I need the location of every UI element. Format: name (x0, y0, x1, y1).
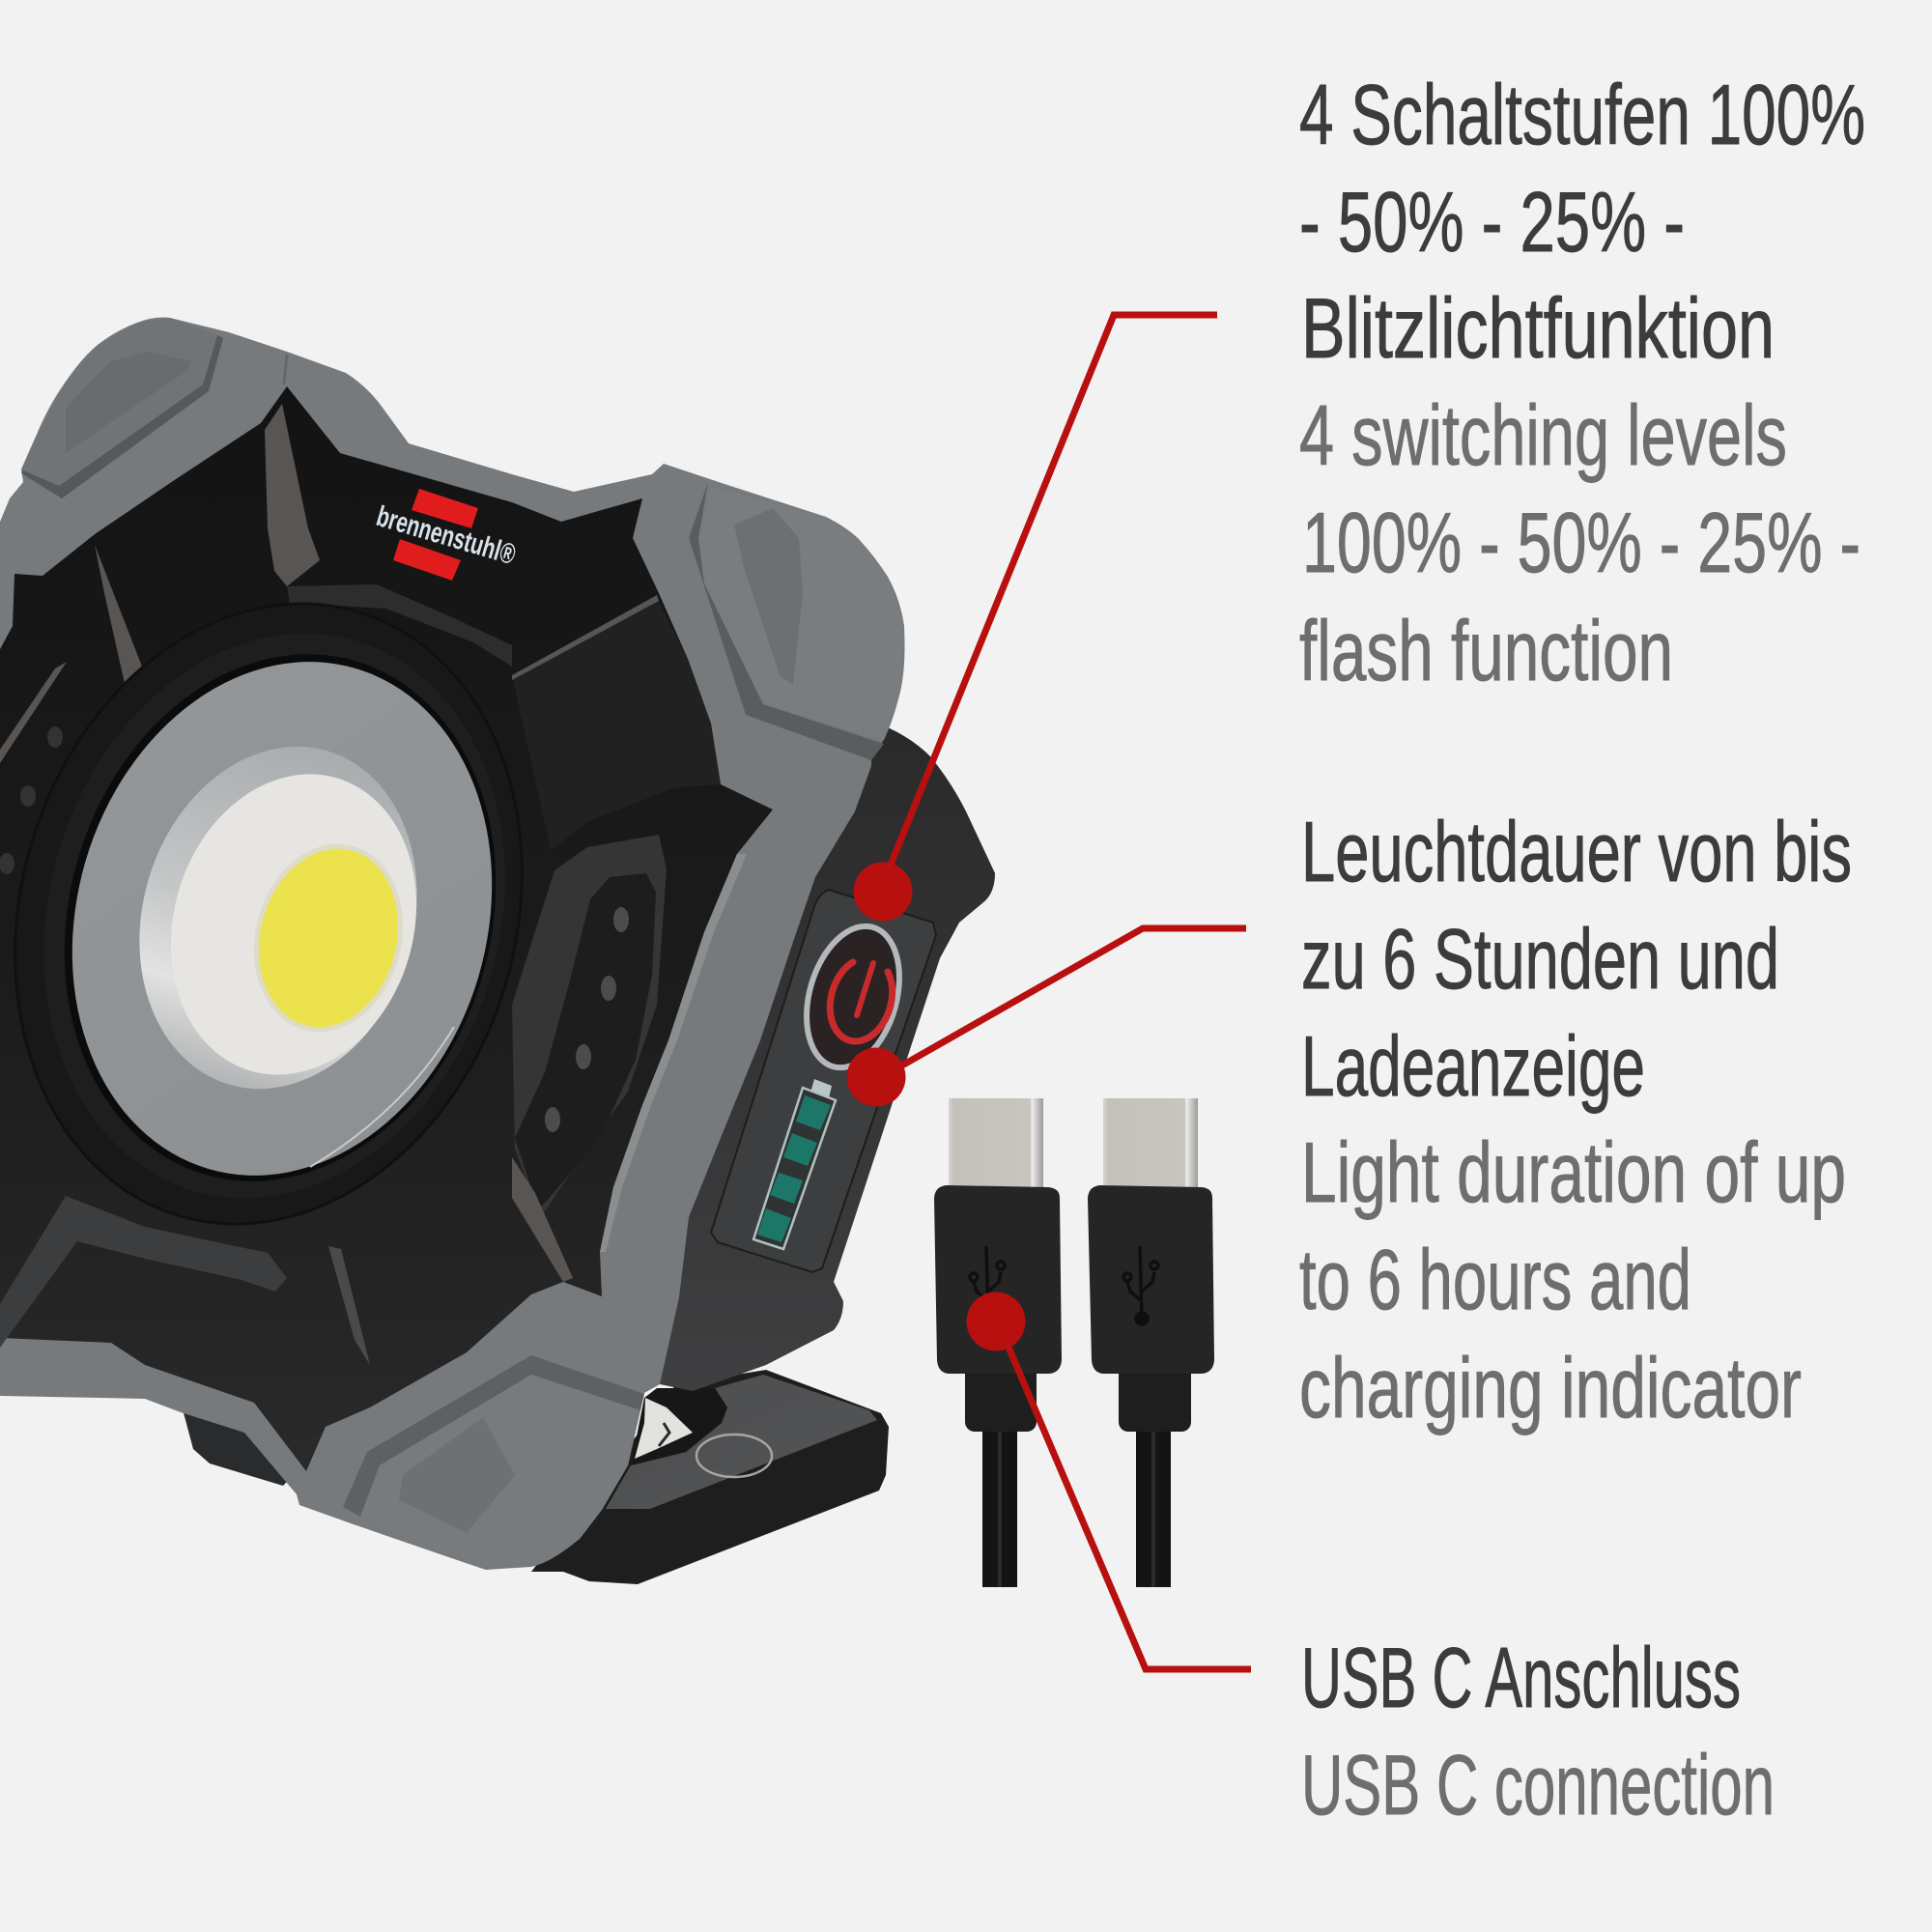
USB symbol (970, 1246, 1005, 1321)
side dots (0, 726, 629, 1132)
left bumper sliver (0, 567, 14, 649)
body facets (0, 584, 721, 1348)
USB symbol (1123, 1246, 1158, 1324)
battery indicator (753, 1079, 836, 1249)
bottom bumper pad (343, 1355, 644, 1570)
marker dot (966, 1293, 1026, 1350)
USB-C cable right (1088, 1098, 1214, 1587)
text block: to 6 hours and (1299, 1232, 1691, 1327)
yellow COB LED (238, 831, 419, 1045)
brand logo: brennenstuhl® (373, 500, 519, 571)
power button (791, 916, 915, 1078)
bumper highlight (600, 854, 747, 1252)
metal grooves (0, 404, 659, 1365)
top-right bumper pad (689, 482, 904, 760)
front body (0, 386, 773, 1471)
rear housing (638, 727, 995, 1391)
marker dot (854, 862, 912, 922)
reflector (135, 744, 452, 1105)
text block: Blitzlichtfunktion (1301, 280, 1775, 376)
USB-C cable left (934, 1098, 1062, 1587)
leader line (894, 928, 1246, 1070)
lens housing (0, 542, 595, 1286)
illustration: LED work light (0, 318, 995, 1584)
lower left foot (182, 1391, 319, 1486)
callout: light duration (846, 804, 1852, 1435)
text block: flash function (1299, 603, 1673, 698)
text block (1301, 1630, 1775, 1833)
text block: - 50% - 25% - (1299, 174, 1685, 270)
callout: USB C (966, 1293, 1775, 1833)
text block: Ladeanzeige (1301, 1018, 1645, 1114)
leader line (1005, 1338, 1251, 1669)
ring highlight (310, 1027, 454, 1167)
chrome ring (99, 713, 457, 1122)
magnetic base (531, 1370, 889, 1584)
marker dot (846, 1047, 906, 1107)
callout: switching levels (854, 67, 1865, 922)
leader line (887, 315, 1217, 874)
control panel (711, 890, 936, 1272)
rubber bumper (0, 318, 904, 1570)
text block (1299, 804, 1852, 1435)
grey ring (12, 611, 553, 1227)
text block (1299, 67, 1865, 698)
brand logo (373, 489, 519, 581)
USB-C cables (934, 1098, 1214, 1587)
top-left bumper pad (21, 318, 287, 498)
